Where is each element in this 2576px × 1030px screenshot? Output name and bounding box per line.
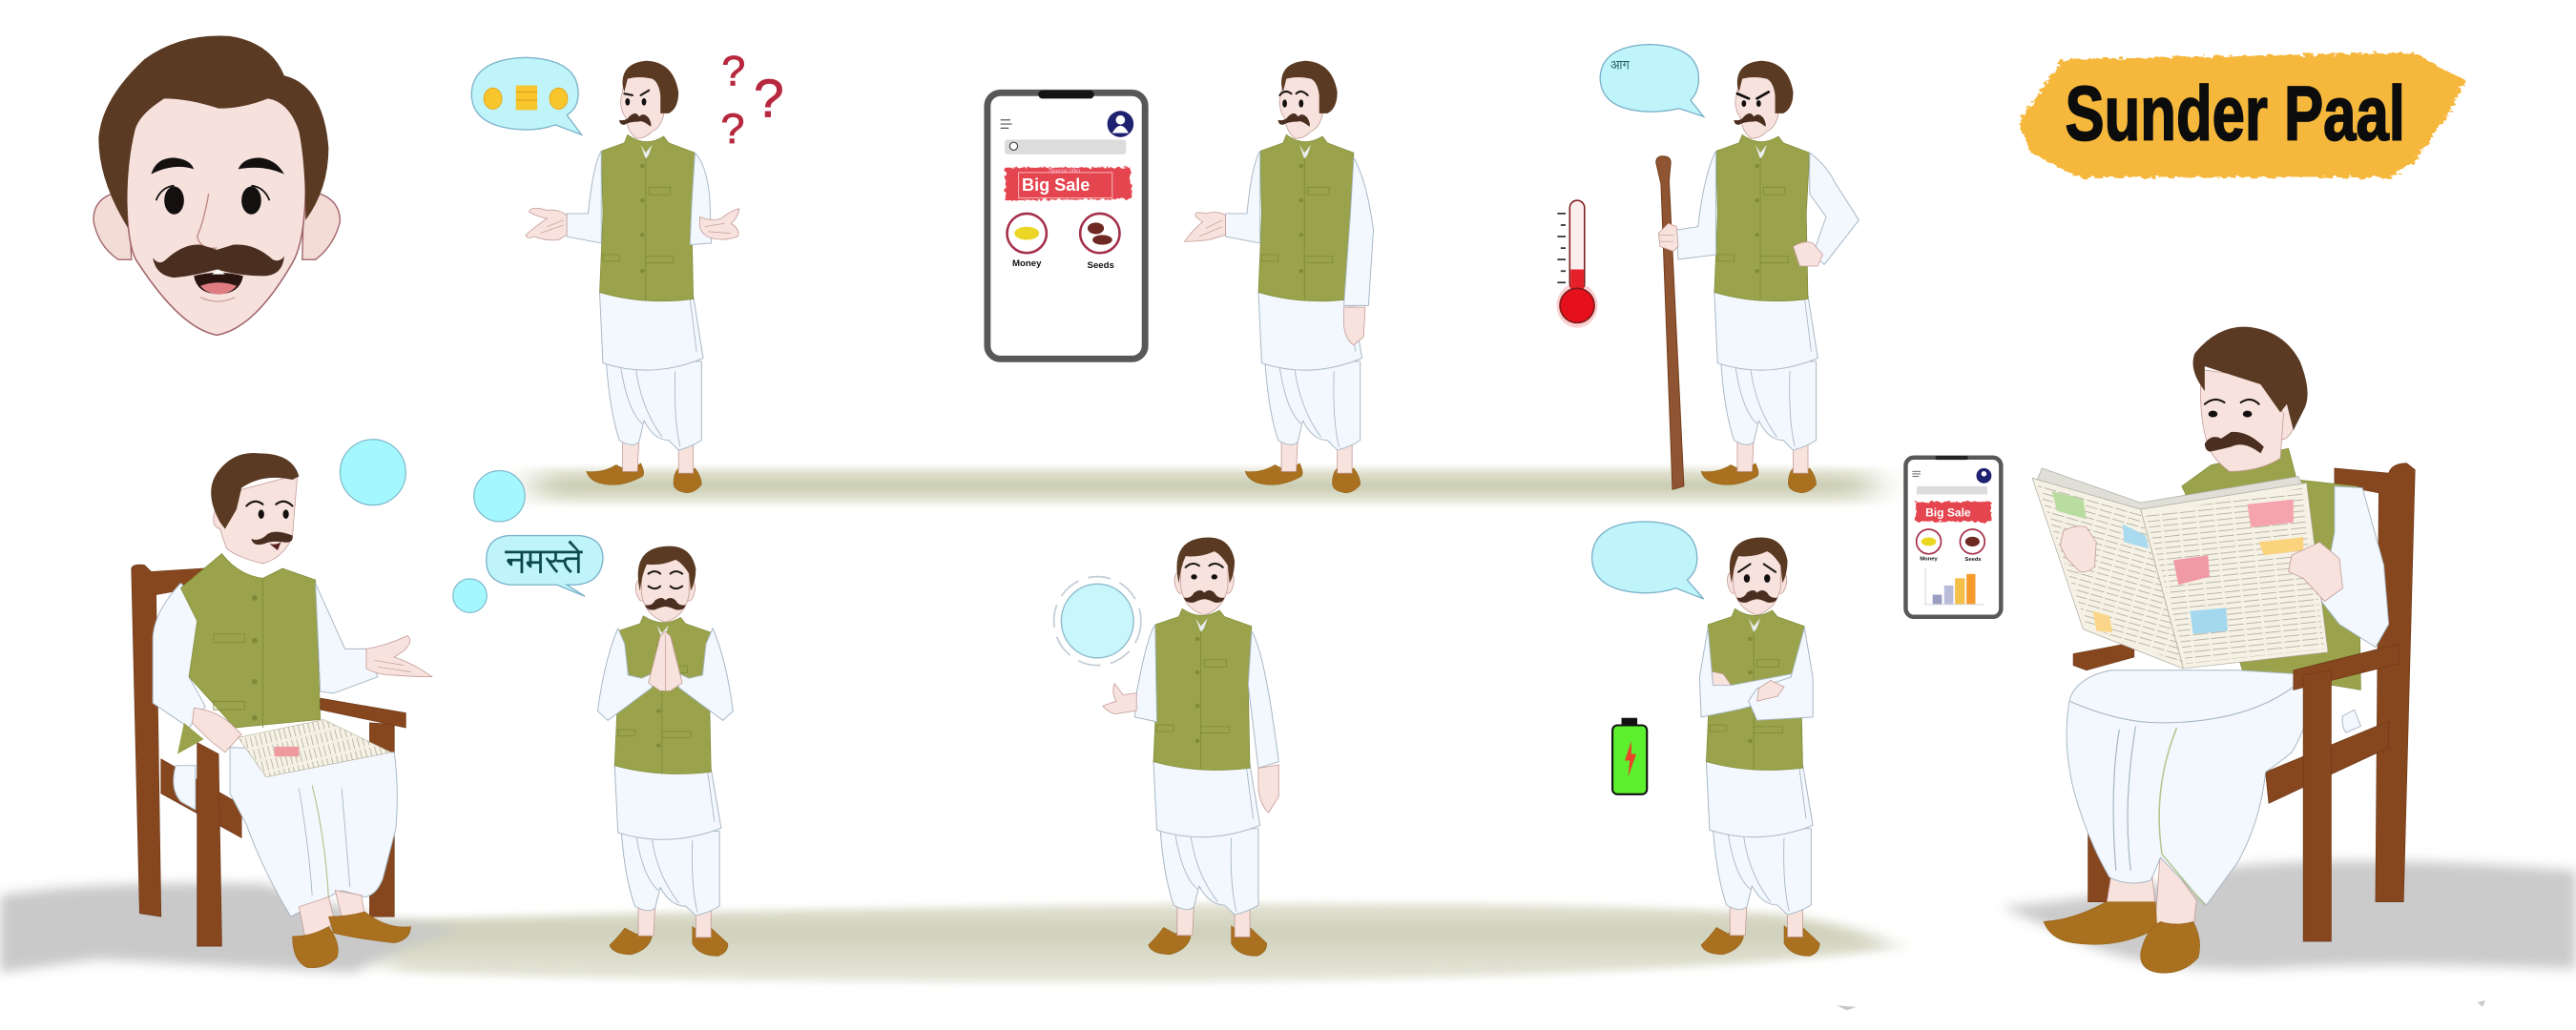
speech bubble: heat word: [1600, 45, 1704, 116]
arms: [597, 628, 733, 720]
battery icon: [1612, 718, 1647, 794]
arms: [526, 151, 739, 245]
question marks: ?: [721, 48, 745, 95]
seeds icon: Seeds: [1964, 557, 1982, 563]
speech bubble: empty: [1592, 522, 1704, 599]
seeds icon: [1960, 529, 1984, 563]
title: Sunder Paal: [2019, 52, 2466, 177]
bar chart: [1925, 568, 1984, 605]
search bar: [1917, 486, 1987, 494]
speech bubble: namaste: [487, 536, 603, 596]
figure: angry man with staff: [1658, 61, 1859, 493]
head: [2193, 327, 2308, 471]
money icon: Money: [1012, 258, 1042, 269]
sale banner: Big Sale: [1022, 175, 1090, 195]
thought circles: [340, 440, 525, 612]
title: Sunder Paal: Sunder Paal: [2065, 71, 2405, 156]
avatar: [1108, 111, 1133, 137]
figure: worried man with crossed arms: [1699, 538, 1819, 956]
head: [1727, 538, 1788, 615]
armrests: [2294, 644, 2399, 690]
chair: [2088, 464, 2415, 902]
small phone with chart: [1905, 456, 2001, 617]
sale banner: [1916, 502, 1991, 522]
ground shadow: left chair: [0, 883, 464, 973]
newspaper: [2032, 468, 2328, 669]
head: [1174, 538, 1235, 615]
figure: confused man: [526, 61, 739, 493]
head: [635, 546, 696, 622]
arms: [1103, 625, 1278, 813]
figure: man presenting phone: [1185, 61, 1374, 493]
reading figure: [2032, 327, 2399, 973]
money icon: [1008, 214, 1047, 269]
arms: [1699, 628, 1813, 720]
head: [211, 453, 299, 564]
question marks: ?: [721, 105, 744, 153]
hands: [2060, 526, 2096, 572]
staff: [1656, 156, 1684, 489]
sale banner: Special offer: [1049, 169, 1080, 175]
money icon: Money: [1920, 556, 1939, 562]
thermometer: [1557, 200, 1598, 328]
chair: [132, 565, 394, 946]
question marks: ?: [754, 69, 784, 129]
speech bubble: heat word: आग: [1610, 57, 1631, 72]
arms: [1185, 151, 1374, 345]
sale banner: Big Sale: [1925, 506, 1971, 520]
speech bubble: namaste: नमस्ते: [505, 541, 583, 582]
armrest: [321, 698, 405, 728]
phone: Big Sale app: [987, 91, 1145, 359]
figure: man with bubble on hand: [1103, 538, 1278, 956]
seeds icon: Seeds: [1088, 260, 1114, 271]
head: [1278, 61, 1338, 138]
figure: namaste man: [597, 546, 733, 956]
portrait: big face: [93, 36, 340, 335]
left seated man with chair: [132, 453, 432, 968]
specks near bottom edge: [1837, 1000, 2485, 1010]
question marks: [721, 48, 784, 153]
head: [619, 61, 678, 138]
speech bubble: coins: [471, 57, 582, 134]
sitting figure: [153, 453, 432, 968]
avatar: [1976, 468, 1991, 484]
moustache: [153, 244, 284, 278]
ground shadow: right chair: [2001, 861, 2576, 970]
right seated man reading newspaper: [2032, 327, 2415, 973]
money icon: [1917, 529, 1941, 562]
glowing empty bubble: [1054, 577, 1141, 666]
mouth: [194, 269, 243, 301]
ground shadow: top row: [534, 468, 1873, 505]
lap newspaper: [239, 719, 391, 777]
seeds icon: [1080, 214, 1120, 271]
search bar: [1005, 139, 1126, 154]
arms: [1658, 151, 1859, 266]
ground shadow: bottom row: [328, 903, 1889, 982]
sale banner: [1006, 168, 1132, 200]
head: [1735, 61, 1793, 138]
